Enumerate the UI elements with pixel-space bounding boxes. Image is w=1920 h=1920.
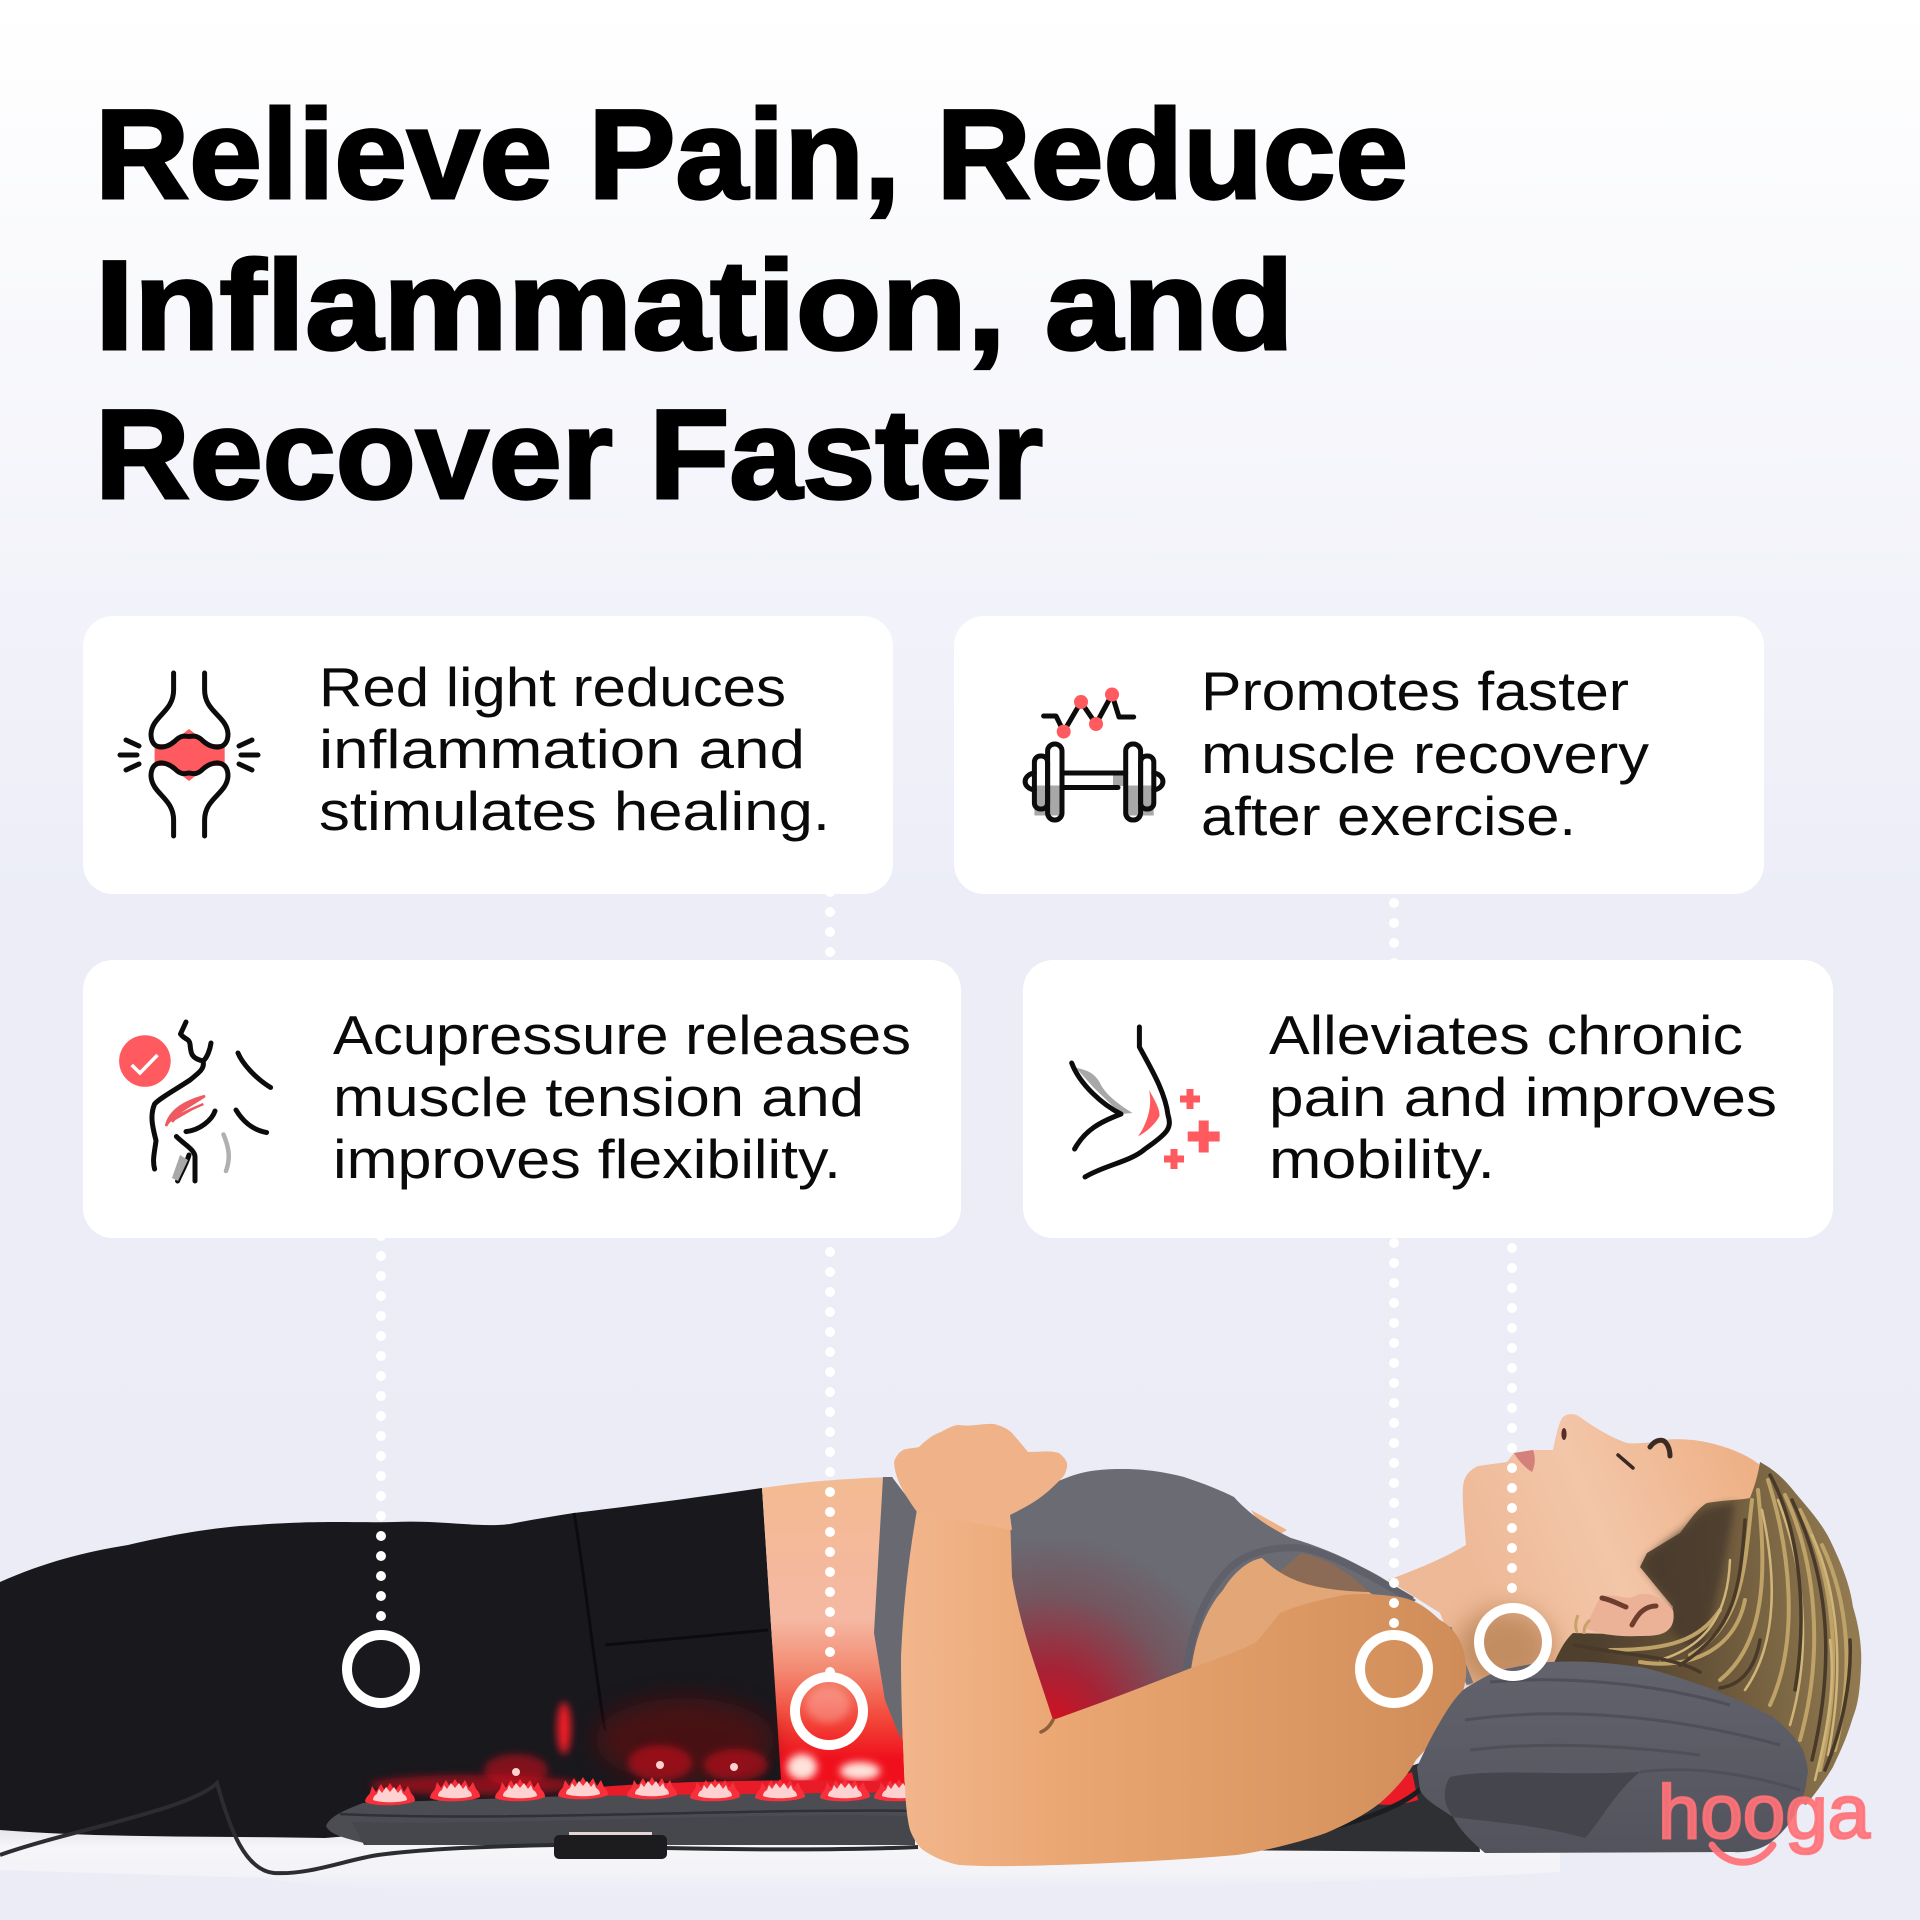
inner ear [1602,1598,1656,1625]
pillow fold [1445,1772,1640,1838]
strap behind neck [1448,1628,1470,1684]
title [95,83,1408,525]
pillow [1417,1661,1808,1853]
text: muscle recovery: Promotes faster [1201,660,1629,722]
text: red light: inflammation and [319,718,805,780]
icon: back with check [119,1022,271,1181]
control box [554,1835,667,1859]
icon: knee joint [120,673,258,836]
text: muscle recovery [1201,660,1650,847]
ear [1585,1594,1674,1636]
arm [901,1510,1466,1866]
armhole skin [1191,1558,1380,1670]
hair shadow near ear [1642,1503,1735,1655]
title: Inflammation, and [95,234,1294,376]
text: acupressure: improves flexibility. [333,1128,841,1190]
eyebrow [1650,1440,1670,1456]
title: Recover Faster [95,383,1043,525]
text: chronic pain: pain and improves [1269,1066,1777,1128]
floor reflection [0,1828,1560,1891]
cable [0,1783,918,1873]
hair [1553,1462,1861,1805]
panel: muscle recovery card [954,616,1764,894]
icon: spine with crosses [1072,1027,1220,1177]
panel: chronic pain card [1023,960,1833,1238]
skin behind strap [1251,1510,1287,1540]
lips [1514,1450,1535,1472]
control box light [569,1832,652,1835]
dotted connector lines [381,883,1512,1676]
panel: acupressure card [83,960,961,1238]
mat bottom shade [352,1815,915,1845]
hand [894,1424,1067,1530]
text: muscle recovery: muscle recovery [1201,723,1650,785]
text: red light [319,656,830,842]
grey top [990,1469,1416,1745]
pillow wrinkles [1465,1680,1800,1790]
photo: woman lying on the mat [0,1414,1871,1891]
hooga logo: hooga [1658,1770,1871,1855]
text: red light: Red light reduces [319,656,786,718]
midriff highlights [787,1687,880,1780]
text: chronic pain [1269,1004,1777,1190]
text: acupressure [333,1004,911,1190]
text: red light: stimulates healing. [319,780,830,842]
text: acupressure: Acupressure releases [333,1004,911,1066]
neck and face [1388,1414,1765,1700]
closed eye [1618,1455,1633,1468]
title: Relieve Pain, Reduce [95,83,1408,225]
red led by shoulder [1365,1772,1418,1805]
back mat under shoulder [1190,1745,1480,1852]
icon: dumbbell with pulse [1025,688,1163,820]
mat seam [340,1811,915,1817]
arm crease [1041,1720,1053,1732]
top side band [874,1477,917,1740]
leggings [0,1488,785,1838]
text: muscle recovery: after exercise. [1201,785,1576,847]
logo smile [1712,1845,1773,1862]
mat [326,1790,915,1845]
midriff skin [762,1477,905,1795]
text: acupressure: muscle tension and [333,1066,864,1128]
mat cable at shoulder [1260,1780,1430,1842]
hair strands [1575,1475,1850,1780]
panel: red light card [83,616,893,894]
text: chronic pain: Alleviates chronic [1269,1004,1743,1066]
red glow on leggings [370,1698,775,1795]
text: chronic pain: mobility. [1269,1128,1495,1190]
leggings seams [574,1513,768,1730]
target rings [347,1608,1547,1745]
neck shade [1455,1608,1555,1692]
earring [1576,1615,1590,1634]
rear led row [590,1780,905,1796]
top arm-hole trim [1186,1548,1412,1670]
underarm shadow [1270,1553,1369,1592]
nostril [1561,1428,1567,1440]
red led nodes [365,1777,924,1805]
